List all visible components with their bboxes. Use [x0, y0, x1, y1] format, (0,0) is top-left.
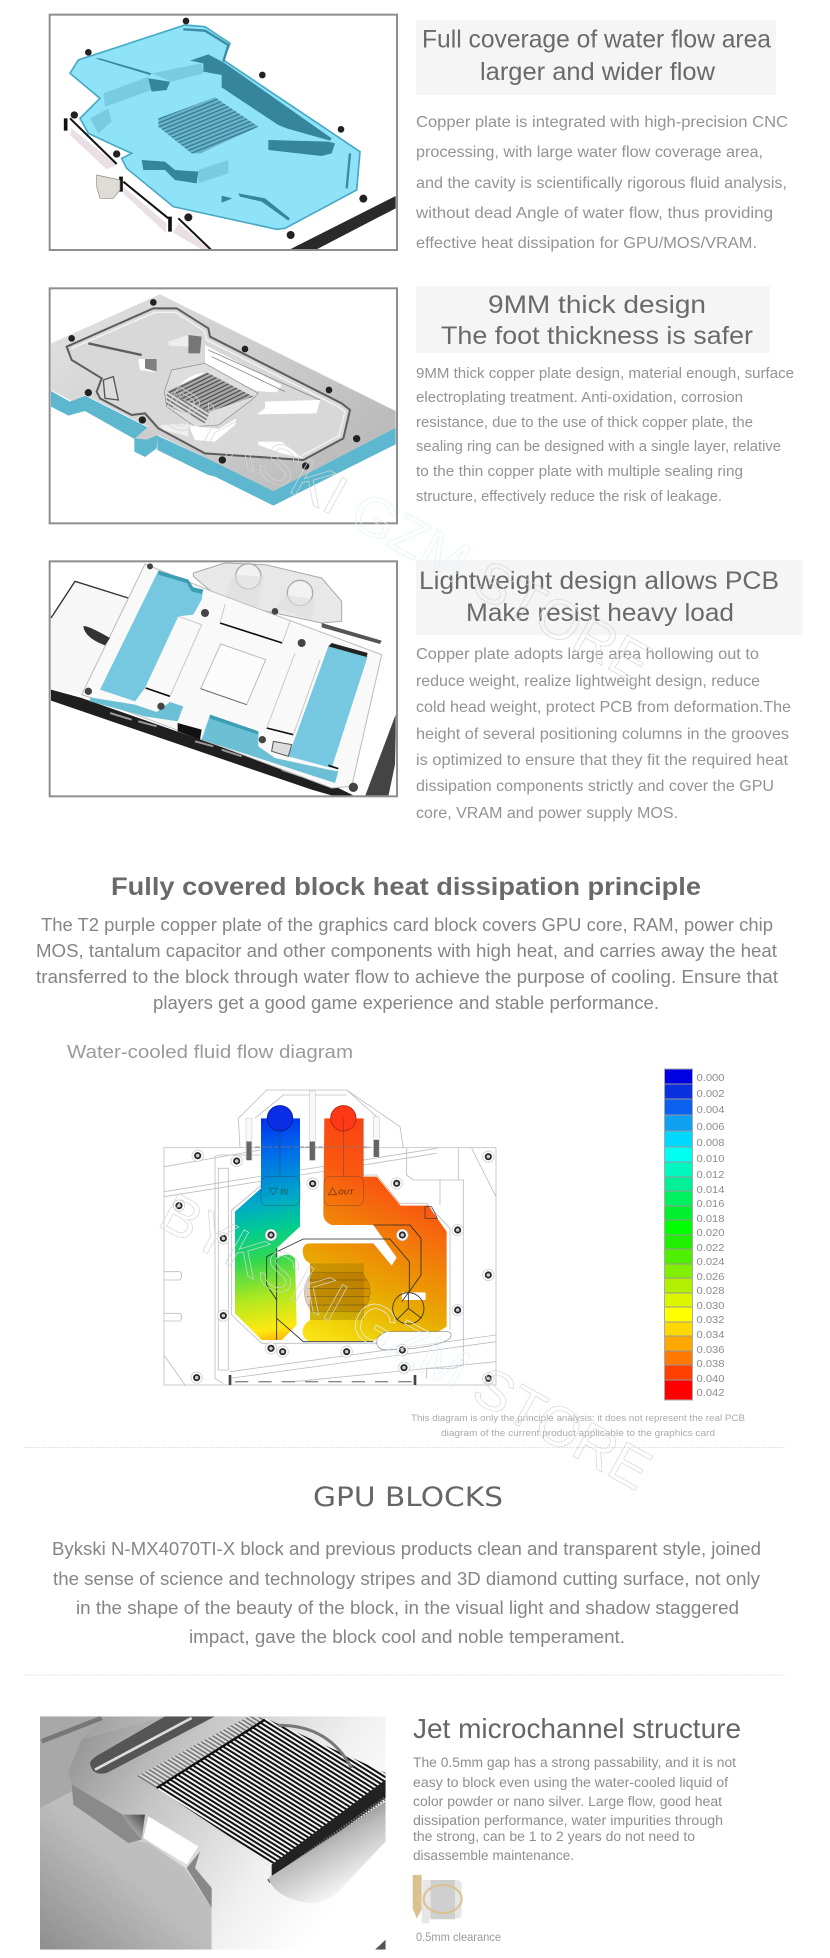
text block: principle description: The T2 purple copper plate of the graphics card block covers GPU core, RAM, power chip: [41, 915, 773, 935]
text block: full coverage description: Copper plate is integrated with high-precision CNC: [416, 114, 788, 131]
text block: principle description: players get a good game experience and stable performance.: [153, 993, 659, 1013]
panel: water flow coverage photo: [50, 15, 397, 250]
legend: colour scale: 0.034: [696, 1329, 725, 1341]
legend: colour scale: 0.004: [696, 1104, 725, 1116]
text block: GPU blocks description: impact, gave the block cool and noble temperament.: [189, 1627, 625, 1647]
text block: principle description: transferred to the block through water flow to achieve the purpose of cooling. Ensure that: [36, 967, 778, 987]
text block: GPU blocks description: the sense of science and technology stripes and 3D diamond cutting surface, not only: [53, 1569, 760, 1589]
text block: jet microchannel description: The 0.5mm gap has a strong passability, and it is not: [413, 1755, 736, 1770]
text block: jet microchannel description: easy to block even using the water-cooled liquid of: [413, 1775, 728, 1790]
text block: jet microchannel description: disassemble maintenance.: [413, 1848, 574, 1863]
text block: lightweight description: core, VRAM and power supply MOS.: [416, 805, 678, 822]
legend: colour scale: 0.000: [696, 1072, 725, 1084]
panel: 9mm copper plate photo: [50, 288, 397, 523]
text block: 9mm description: sealing ring can be designed with a single layer, relative: [416, 438, 781, 455]
text block: jet microchannel description: dissipation performance, water impurities through: [413, 1813, 723, 1828]
text block: lightweight description: reduce weight, realize lightweight design, reduce: [416, 673, 760, 690]
chart: water-cooled fluid flow diagram: IN: [280, 1188, 288, 1197]
note: diagram disclaimer: diagram of the current product applicable to the graphics card: [441, 1428, 715, 1439]
legend: colour scale: 0.024: [696, 1256, 725, 1268]
text block: 9mm description: 9MM thick copper plate design, material enough, surface: [416, 365, 794, 382]
heading: lightweight design: Lightweight design allows PCB: [419, 567, 779, 595]
note: diagram disclaimer: [411, 1413, 745, 1439]
legend: colour scale: 0.008: [696, 1137, 725, 1149]
text block: full coverage description: without dead Angle of water flow, thus providing: [415, 205, 773, 222]
text block: lightweight description: is optimized to ensure that they fit the required heat: [416, 752, 789, 769]
icon: 0.5mm clearance illustration: [413, 1875, 462, 1923]
text block: GPU blocks description: Bykski N-MX4070TI-X block and previous products clean and transparent style, joined: [52, 1539, 761, 1559]
legend: colour scale: [664, 1069, 725, 1400]
text block: GPU blocks description: in the shape of the beauty of the block, in the visual light and shadow staggered: [76, 1598, 739, 1618]
legend: colour scale: 0.040: [696, 1373, 725, 1385]
legend: colour scale: 0.014: [696, 1184, 725, 1196]
chart: water-cooled fluid flow diagram: OUT: [338, 1188, 354, 1197]
label: flow diagram caption: Water-cooled fluid flow diagram: [67, 1042, 353, 1062]
text block: principle description: [36, 915, 778, 1013]
text block: jet microchannel description: [413, 1755, 736, 1863]
text block: lightweight description: dissipation components strictly and cover the GPU: [416, 778, 774, 795]
chart: water-cooled fluid flow diagram: [164, 1090, 496, 1385]
text block: lightweight description: [416, 646, 791, 822]
watermark: lower store mark: BYKSKI GZM STORE: [150, 1180, 662, 1502]
text block: jet microchannel description: color powder or nano silver. Large flow, good heat: [413, 1794, 722, 1809]
heading: 9mm thick design: 9MM thick design: [488, 291, 706, 319]
heading: heat dissipation principle: Fully covered block heat dissipation principle: [111, 873, 701, 901]
heading: GPU blocks: GPU BLOCKS: [313, 1482, 503, 1513]
text block: full coverage description: [415, 114, 788, 252]
text block: full coverage description: effective heat dissipation for GPU/MOS/VRAM.: [416, 235, 757, 252]
legend: colour scale: 0.028: [696, 1285, 725, 1297]
label: 0.5mm clearance: 0.5mm clearance: [416, 1930, 501, 1944]
text block: full coverage description: and the cavity is scientifically rigorous fluid analysis,: [416, 175, 787, 192]
legend: colour scale: 0.042: [696, 1387, 725, 1399]
heading: lightweight design: Make resist heavy load: [466, 599, 734, 627]
legend: colour scale: 0.032: [696, 1314, 725, 1326]
legend: colour scale: 0.012: [696, 1169, 725, 1181]
text block: lightweight description: height of several positioning columns in the grooves: [416, 726, 789, 743]
text block: full coverage description: processing, with large water flow coverage area,: [416, 144, 763, 161]
watermark: upper store mark: BYKSKI GZM STORE: [150, 373, 662, 695]
legend: colour scale: 0.016: [696, 1198, 725, 1210]
text block: GPU blocks description: [52, 1539, 761, 1647]
legend: colour scale: 0.036: [696, 1344, 725, 1356]
legend: colour scale: 0.006: [696, 1121, 725, 1133]
panel: lightweight hollowed plate photo: [50, 561, 397, 796]
legend: colour scale: 0.020: [696, 1227, 725, 1239]
text block: 9mm description: to the thin copper plate with multiple sealing ring: [416, 463, 743, 480]
text block: lightweight description: cold head weight, protect PCB from deformation.The: [416, 699, 791, 716]
legend: colour scale: 0.030: [696, 1300, 725, 1312]
note: diagram disclaimer: This diagram is only the principle analysis: it does not represent the real PCB: [411, 1413, 745, 1424]
text block: 9mm description: [416, 365, 794, 505]
legend: colour scale: 0.022: [696, 1242, 725, 1254]
legend: colour scale: 0.018: [696, 1213, 725, 1225]
text block: 9mm description: structure, effectively reduce the risk of leakage.: [416, 488, 722, 505]
heading: 9mm thick design: The foot thickness is safer: [441, 322, 753, 350]
heading: jet microchannel structure: Jet microchannel structure: [413, 1713, 741, 1744]
text block: 9mm description: resistance, due to the use of thick copper plate, the: [416, 414, 753, 431]
text block: principle description: MOS, tantalum capacitor and other components with high heat, and carries away the heat: [36, 941, 777, 961]
legend: colour scale: 0.038: [696, 1358, 725, 1370]
text block: jet microchannel description: the strong, can be 1 to 2 years do not need to: [413, 1829, 695, 1844]
heading: lightweight design: [416, 560, 803, 635]
legend: colour scale: 0.026: [696, 1271, 725, 1283]
legend: colour scale: 0.002: [696, 1088, 725, 1100]
heading: full coverage: larger and wider flow: [480, 58, 716, 86]
heading: full coverage: Full coverage of water flow area: [422, 26, 771, 54]
heading: 9mm thick design: [416, 286, 770, 353]
legend: colour scale: 0.010: [696, 1153, 725, 1165]
text block: 9mm description: electroplating treatment. Anti-oxidation, corrosion: [416, 389, 743, 406]
heading: full coverage: [416, 20, 776, 95]
photo: jet microchannel fins: [40, 1716, 386, 1950]
text block: lightweight description: Copper plate adopts large area hollowing out to: [416, 646, 759, 663]
